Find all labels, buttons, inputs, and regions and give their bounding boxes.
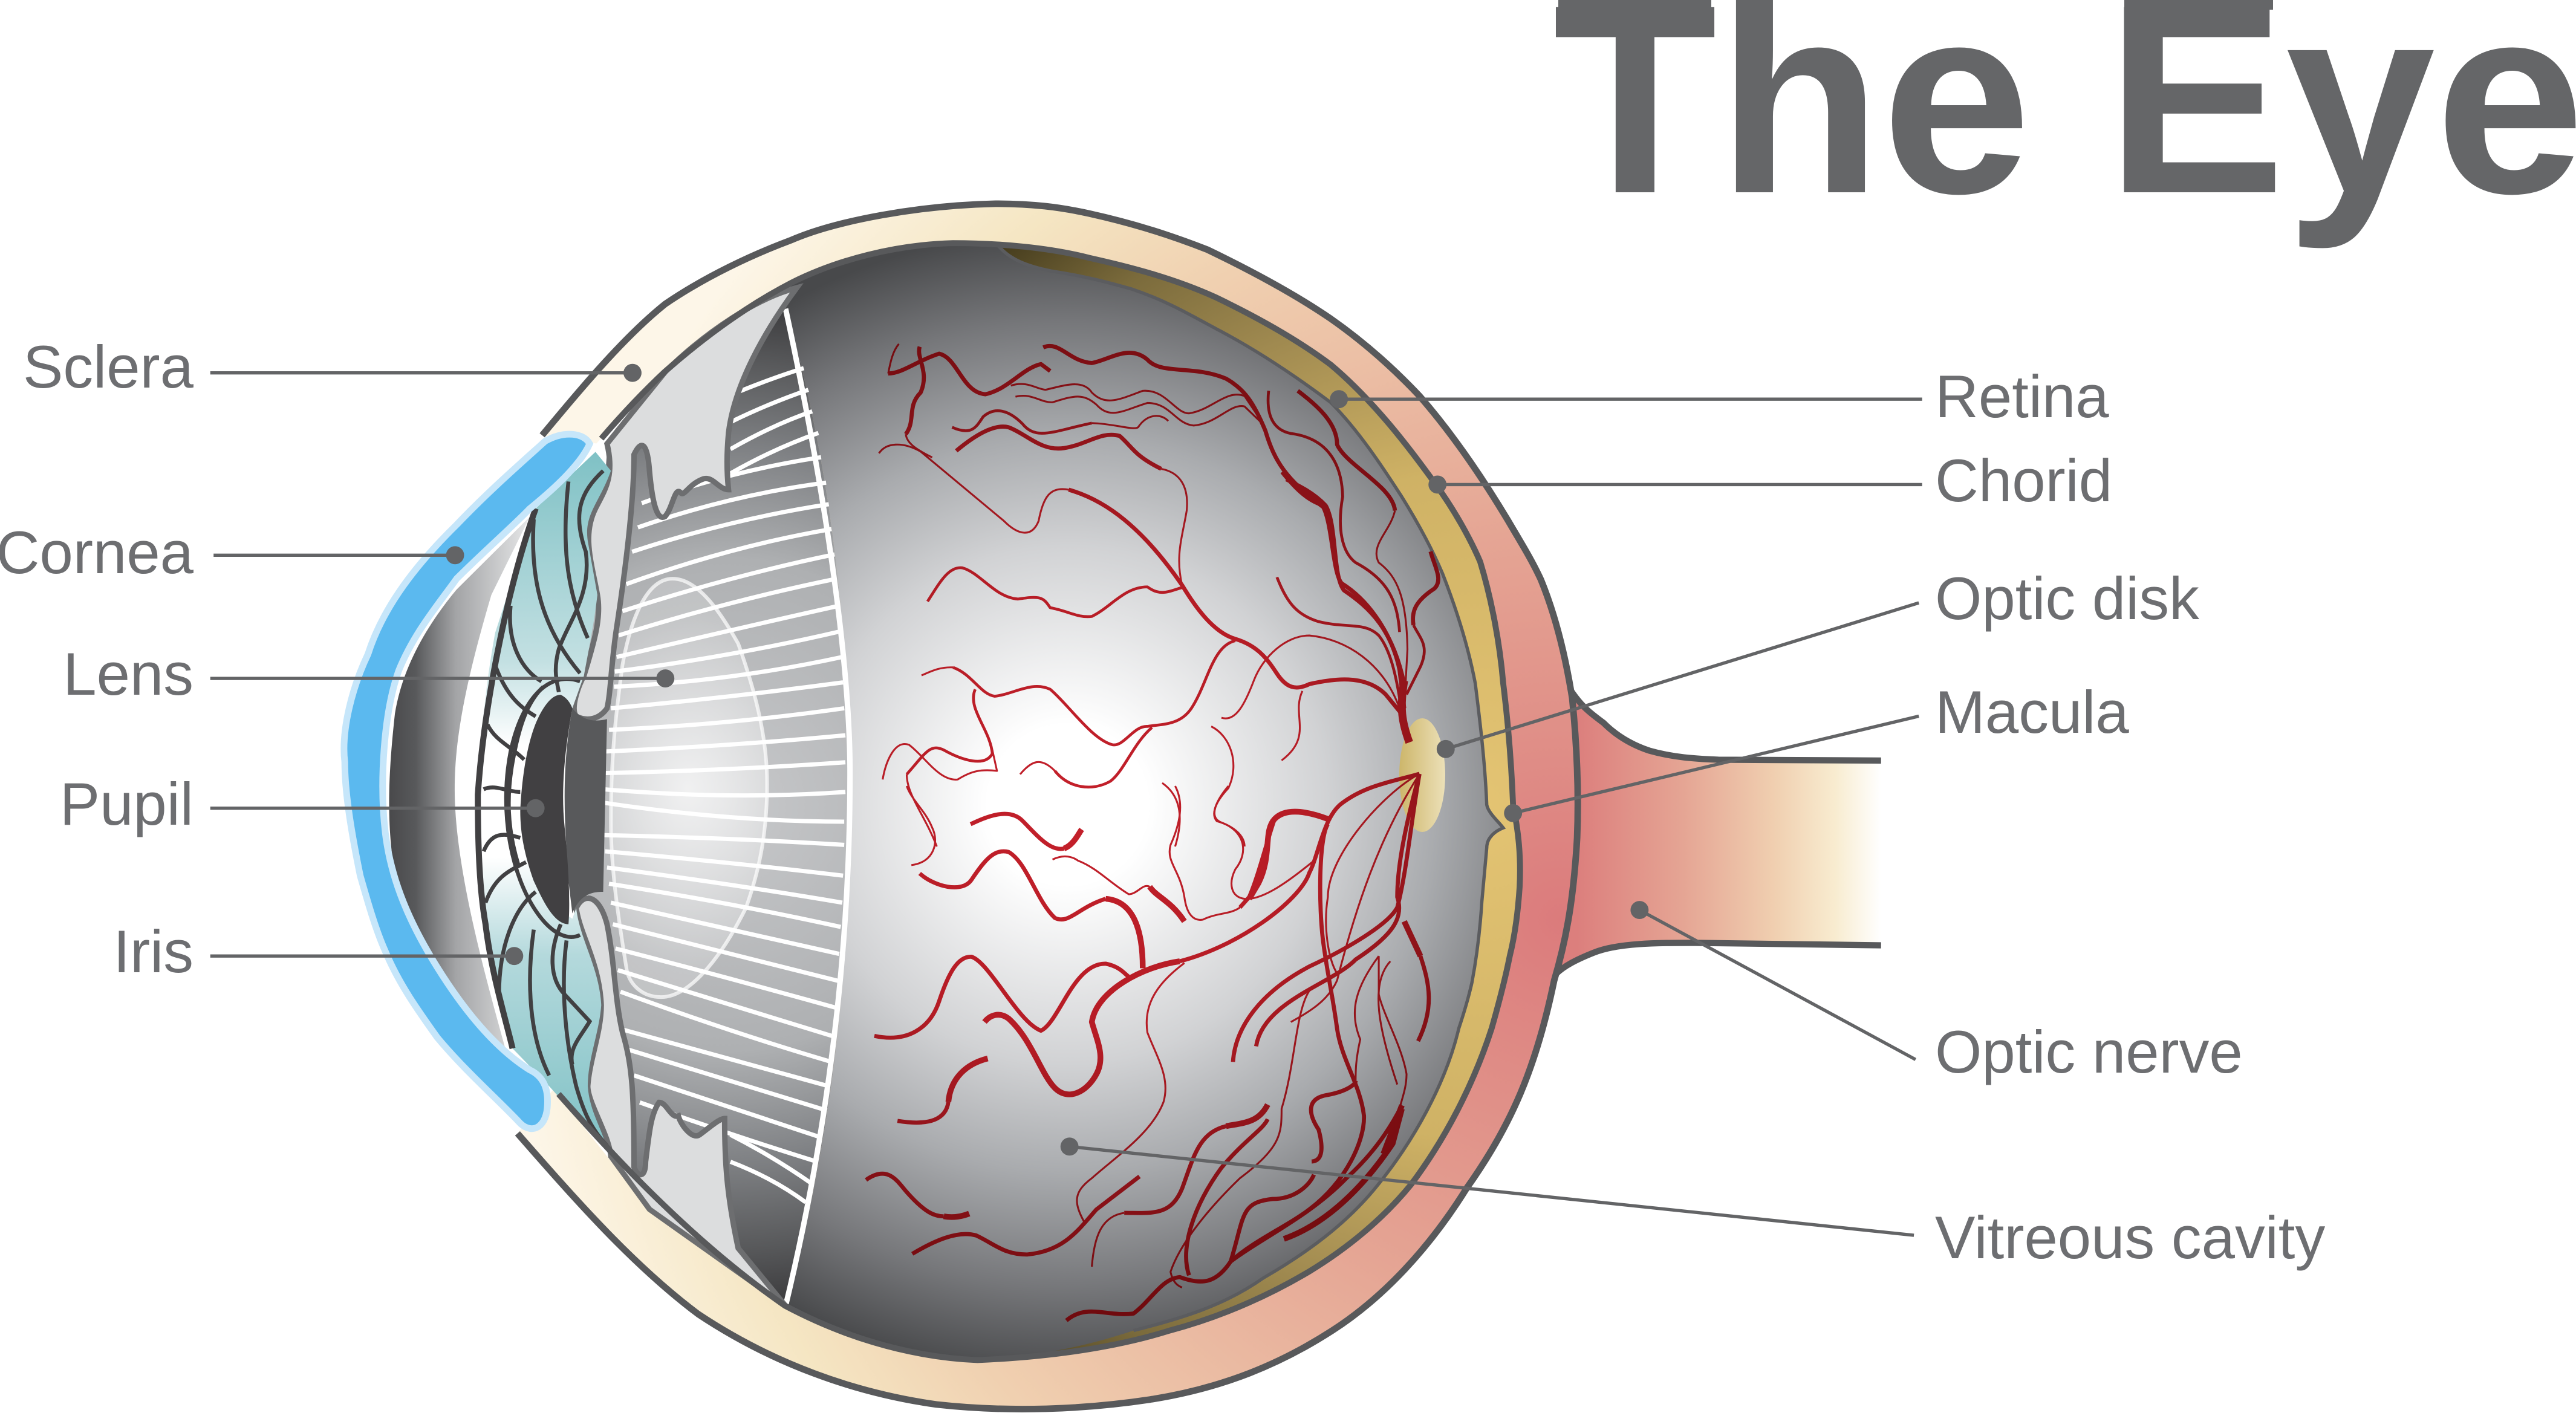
label: Iris: Iris bbox=[113, 918, 194, 986]
lens body behind pupil bbox=[565, 708, 607, 914]
front of the eye bbox=[344, 288, 850, 1306]
label: Macula: Macula bbox=[1935, 679, 2129, 746]
label: Vitreous cavity: Vitreous cavity bbox=[1935, 1204, 2325, 1272]
label: Retina: Retina bbox=[1935, 363, 2109, 430]
leader: macula bbox=[1504, 716, 1919, 822]
label: Optic disk: Optic disk bbox=[1935, 565, 2199, 632]
iris fibres bbox=[478, 471, 607, 1146]
leader lines bbox=[210, 364, 1922, 1235]
eye diagram bbox=[344, 204, 1881, 1409]
ciliary body upper bbox=[574, 288, 797, 719]
leader: retina bbox=[1330, 390, 1922, 408]
cornea bbox=[344, 434, 590, 1129]
lens bbox=[611, 579, 767, 997]
blood vessels upper bbox=[879, 344, 1439, 846]
sclera bbox=[518, 204, 1578, 1409]
label: Sclera: Sclera bbox=[23, 334, 194, 401]
blood vessels lower bbox=[866, 774, 1429, 1320]
retina edge bbox=[999, 247, 1503, 1331]
front chamber bbox=[389, 516, 530, 1054]
leader: lens bbox=[210, 669, 674, 687]
ciliary body lower bbox=[576, 898, 785, 1306]
vitreous boundary bbox=[785, 309, 850, 1306]
leader: iris bbox=[210, 947, 523, 965]
leader: optic disk bbox=[1437, 603, 1919, 758]
choroid bbox=[953, 243, 1520, 1360]
pupil bbox=[520, 695, 572, 924]
zonule region bbox=[575, 282, 850, 1306]
leader: chorid bbox=[1428, 476, 1922, 493]
leader: pupil bbox=[210, 799, 545, 817]
vitreous cavity bbox=[785, 243, 1503, 1360]
leader: cornea bbox=[213, 546, 464, 564]
leader: sclera bbox=[210, 364, 642, 382]
label: Chorid: Chorid bbox=[1935, 447, 2112, 515]
zonule fibres bbox=[603, 368, 845, 1202]
iris bbox=[478, 452, 611, 1151]
optic nerve bbox=[1556, 685, 1881, 974]
label: Optic nerve: Optic nerve bbox=[1935, 1019, 2243, 1086]
label: Pupil: Pupil bbox=[60, 771, 194, 838]
sclera inner line bbox=[559, 243, 1520, 1360]
label: Lens: Lens bbox=[63, 641, 194, 708]
leader: vitreous cavity bbox=[1061, 1137, 1914, 1235]
label: Cornea: Cornea bbox=[0, 519, 194, 586]
optic disk bbox=[1399, 718, 1445, 832]
leader: optic nerve bbox=[1630, 901, 1916, 1059]
